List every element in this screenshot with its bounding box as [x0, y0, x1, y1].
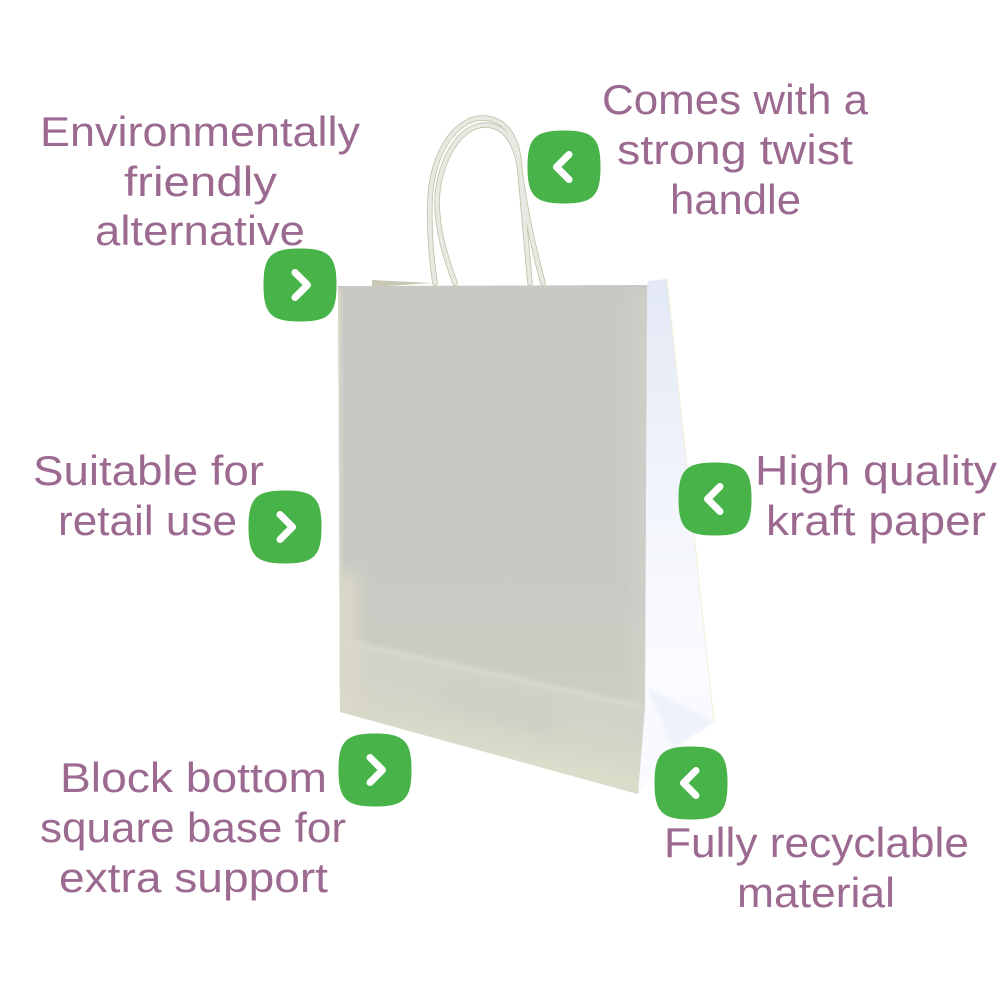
label: block bottom square base: extra support	[59, 854, 328, 901]
label: strong twist handle	[602, 76, 869, 223]
label: fully recyclable material: Fully recyclable	[664, 819, 969, 866]
icon: right arrow, block bottom	[338, 734, 412, 806]
label: high quality kraft paper	[755, 447, 997, 544]
label: strong twist handle: strong twist	[617, 126, 853, 173]
icon: left arrow, twist handle	[528, 130, 600, 204]
label: high quality kraft paper: High quality	[755, 447, 997, 494]
label: fully recyclable material	[664, 819, 969, 916]
icon: right arrow, environmentally friendly	[264, 248, 336, 322]
bag front panel	[330, 280, 655, 800]
label: environmentally friendly alternative: Environmentally	[40, 108, 360, 155]
back flap of bag	[372, 280, 432, 287]
icon: left arrow, kraft paper	[678, 462, 752, 536]
label: strong twist handle: Comes with a	[602, 76, 869, 123]
label: block bottom square base: Block bottom	[60, 754, 327, 801]
icon: left arrow, recyclable	[654, 746, 728, 820]
paper bag illustration	[330, 118, 714, 800]
label: fully recyclable material: material	[737, 869, 895, 916]
bag handle	[430, 118, 543, 283]
label: environmentally friendly alternative	[40, 108, 360, 254]
bag side gusset	[638, 279, 714, 794]
label: environmentally friendly alternative: friendly	[124, 158, 277, 205]
label: high quality kraft paper: kraft paper	[766, 497, 986, 544]
label: block bottom square base: square base for	[40, 804, 346, 851]
label: suitable for retail use: Suitable for	[33, 447, 264, 494]
label: suitable for retail use	[33, 447, 264, 544]
icon: right arrow, retail use	[248, 490, 322, 564]
label: strong twist handle: handle	[670, 176, 801, 223]
label: suitable for retail use: retail use	[58, 497, 237, 544]
label: environmentally friendly alternative: alternative	[95, 207, 305, 254]
label: block bottom square base	[40, 754, 346, 901]
